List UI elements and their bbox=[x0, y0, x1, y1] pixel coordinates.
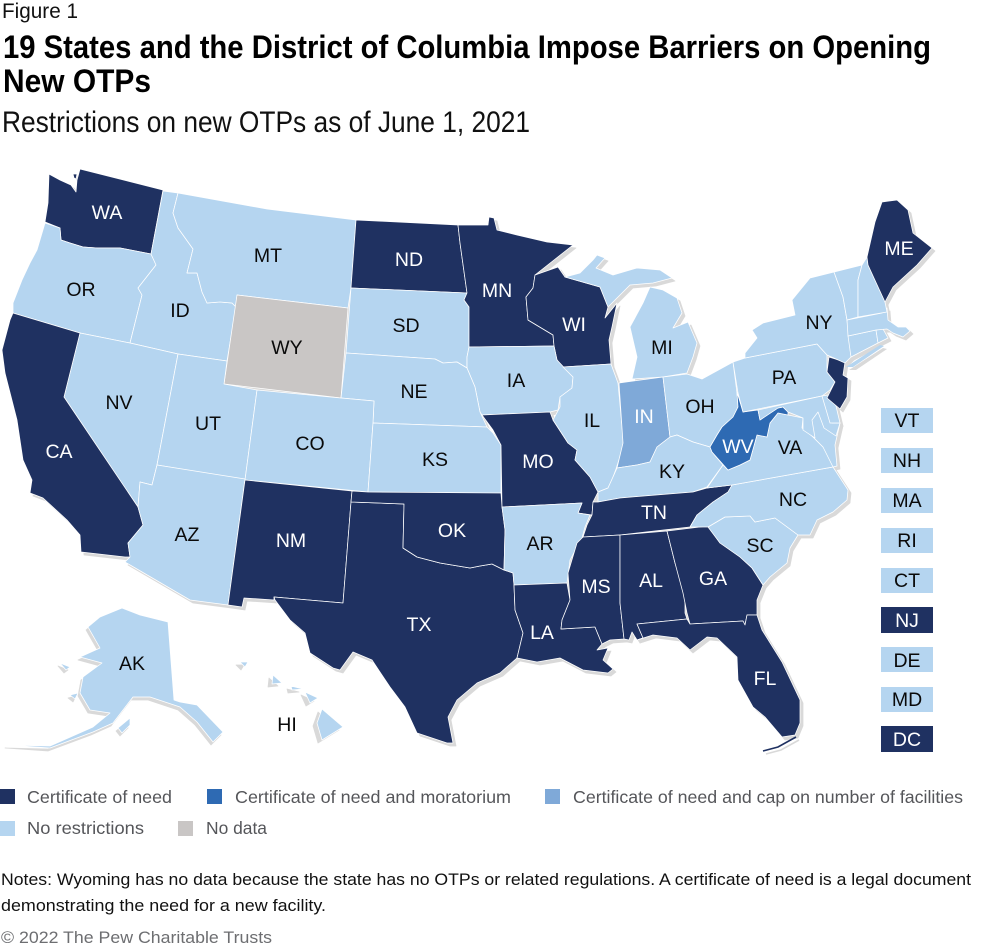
state: TN: TN bbox=[641, 502, 667, 524]
state: IL: IL bbox=[584, 410, 600, 432]
state: SC: SC bbox=[746, 535, 774, 557]
Chesapeake shoreline and Delmarva bbox=[803, 396, 840, 467]
state: MS bbox=[561, 535, 624, 644]
small-state key: DC bbox=[881, 726, 933, 752]
state: MO bbox=[482, 412, 598, 515]
state: LA bbox=[514, 583, 613, 673]
state: WI: WI bbox=[562, 314, 586, 336]
state: ID bbox=[130, 191, 236, 361]
state: AL bbox=[620, 531, 687, 640]
state: UT: UT bbox=[195, 413, 221, 435]
small-state key: DE bbox=[881, 647, 933, 672]
state: OH: OH bbox=[685, 396, 715, 418]
figure label: Figure 1 bbox=[2, 0, 78, 23]
notes: demonstrating the need for a new facility. bbox=[1, 896, 326, 915]
legend item: no restrictions: No restrictions bbox=[27, 818, 144, 838]
state: WV bbox=[710, 392, 788, 470]
icon: Florida Keys bbox=[763, 737, 796, 751]
state: MN: MN bbox=[482, 280, 512, 302]
state: SD bbox=[346, 288, 469, 368]
state: MA bbox=[847, 308, 910, 337]
state: NE: NE bbox=[400, 381, 428, 403]
small-state key: CT bbox=[881, 568, 933, 593]
small-state key: NH bbox=[881, 448, 933, 473]
state: AK bbox=[7, 608, 223, 748]
state: KS bbox=[368, 423, 501, 493]
title: 19 States and the District of Columbia Impose Barriers on Opening bbox=[3, 29, 931, 65]
state: MN bbox=[458, 217, 573, 347]
state: MS: MS bbox=[581, 576, 611, 598]
state: NC bbox=[690, 467, 848, 535]
small-state key: NJ: NJ bbox=[895, 610, 919, 632]
state: CO: CO bbox=[295, 433, 325, 455]
state: WY: WY bbox=[271, 337, 303, 359]
small-state key: CT: CT bbox=[894, 570, 920, 592]
state: IN bbox=[617, 377, 670, 468]
legend item: certificate of need: Certificate of need bbox=[27, 787, 172, 807]
small-state key: DE: DE bbox=[893, 650, 921, 672]
state: ND bbox=[351, 220, 467, 293]
state: ME: ME bbox=[884, 238, 914, 260]
state: ME bbox=[867, 200, 932, 302]
state: TN bbox=[583, 485, 732, 537]
state: VT bbox=[834, 265, 862, 320]
state: KY: KY bbox=[659, 461, 685, 483]
map of the United States bbox=[2, 169, 932, 751]
title: New OTPs bbox=[3, 63, 151, 99]
state: SC bbox=[708, 516, 798, 585]
state: NY: NY bbox=[805, 312, 833, 334]
state: CO bbox=[245, 390, 374, 492]
state: MI bbox=[630, 287, 697, 379]
state: NV bbox=[64, 333, 178, 507]
state: SD: SD bbox=[392, 315, 420, 337]
state: HI islands bbox=[240, 662, 343, 740]
state: PA: PA bbox=[772, 367, 796, 389]
state: OR: OR bbox=[66, 279, 96, 301]
state: NY bbox=[745, 272, 851, 363]
state: VA: VA bbox=[778, 437, 802, 459]
state: WA: WA bbox=[92, 202, 122, 224]
small-state key: NJ bbox=[881, 607, 933, 633]
state: CA bbox=[2, 313, 143, 557]
state: WV: WV bbox=[722, 436, 754, 458]
label: HI: HI bbox=[277, 714, 297, 736]
title bbox=[3, 29, 931, 99]
small-state key: RI bbox=[881, 528, 933, 553]
state: TX bbox=[274, 502, 523, 743]
state: GA bbox=[667, 526, 763, 625]
legend item: no data bbox=[178, 818, 267, 838]
small-state key: RI: RI bbox=[897, 530, 917, 552]
state: MI upper bbox=[565, 255, 672, 307]
legend item: certificate of need and cap: Certificate of need and cap on number of facilities bbox=[573, 787, 963, 807]
subtitle: Restrictions on new OTPs as of June 1, 2021 bbox=[2, 106, 530, 139]
state: FL: FL bbox=[754, 668, 777, 690]
state: GA: GA bbox=[699, 568, 727, 590]
state: ID: ID bbox=[170, 300, 190, 322]
notes bbox=[1, 870, 971, 915]
state: IA bbox=[467, 346, 573, 415]
legend item: certificate of need and moratorium: Certificate of need and moratorium bbox=[235, 787, 511, 807]
state: FL bbox=[637, 615, 800, 737]
state: AZ: AZ bbox=[175, 524, 200, 546]
notes: Notes: Wyoming has no data because the state has no OTPs or related regulations. A certificate of need is a legal document bbox=[1, 870, 971, 889]
state: NJ bbox=[827, 357, 848, 409]
state: NM bbox=[228, 480, 352, 607]
state: RI bbox=[876, 329, 888, 343]
state: AR: AR bbox=[526, 533, 554, 555]
state: WA bbox=[45, 169, 163, 254]
state: NM: NM bbox=[276, 530, 306, 552]
state: ND: ND bbox=[395, 249, 423, 271]
state: PA bbox=[733, 344, 835, 412]
copyright: © 2022 The Pew Charitable Trusts bbox=[1, 928, 272, 947]
state: IL bbox=[553, 364, 623, 492]
state: CT bbox=[848, 330, 878, 357]
state: OR bbox=[13, 223, 156, 343]
state: KS: KS bbox=[422, 449, 448, 471]
state: OH bbox=[663, 362, 738, 447]
icon: Long Island bbox=[846, 345, 884, 367]
small-state key: MD bbox=[881, 687, 933, 712]
state: DE bbox=[822, 395, 840, 423]
state: KY bbox=[598, 435, 723, 502]
legend bbox=[0, 787, 963, 838]
small-state key: VT bbox=[881, 408, 933, 433]
small-state key: DC: DC bbox=[893, 729, 921, 751]
small-state key: NH: NH bbox=[893, 450, 921, 472]
small-state key: MA bbox=[881, 488, 933, 513]
state: AR bbox=[502, 503, 590, 585]
state: NV: NV bbox=[105, 392, 133, 414]
small-state key: MA: MA bbox=[892, 490, 922, 512]
state: OK: OK bbox=[438, 520, 466, 542]
state: MI: MI bbox=[651, 337, 673, 359]
state: NH bbox=[858, 257, 887, 317]
state: AL: AL bbox=[639, 570, 663, 592]
state: MT bbox=[173, 193, 356, 308]
small-state key: MD: MD bbox=[892, 689, 922, 711]
state: VA bbox=[707, 413, 833, 488]
state: WI bbox=[526, 267, 617, 367]
state: MT: MT bbox=[254, 245, 282, 267]
state: AZ bbox=[125, 465, 245, 605]
state: NC: NC bbox=[779, 489, 807, 511]
state: LA: LA bbox=[530, 622, 554, 644]
state: AK: AK bbox=[119, 653, 145, 675]
legend item: no data: No data bbox=[206, 818, 267, 838]
state: TX: TX bbox=[407, 614, 431, 636]
state: MD bbox=[758, 396, 840, 438]
state: UT bbox=[157, 354, 257, 480]
state: NE bbox=[341, 353, 487, 427]
state: OK bbox=[351, 491, 505, 570]
state: WY bbox=[224, 295, 348, 398]
state: MO: MO bbox=[522, 451, 554, 473]
state: CA: CA bbox=[45, 441, 73, 463]
small-state key: VT: VT bbox=[895, 410, 920, 432]
state: IN: IN bbox=[634, 406, 654, 428]
state: IA: IA bbox=[507, 370, 525, 392]
